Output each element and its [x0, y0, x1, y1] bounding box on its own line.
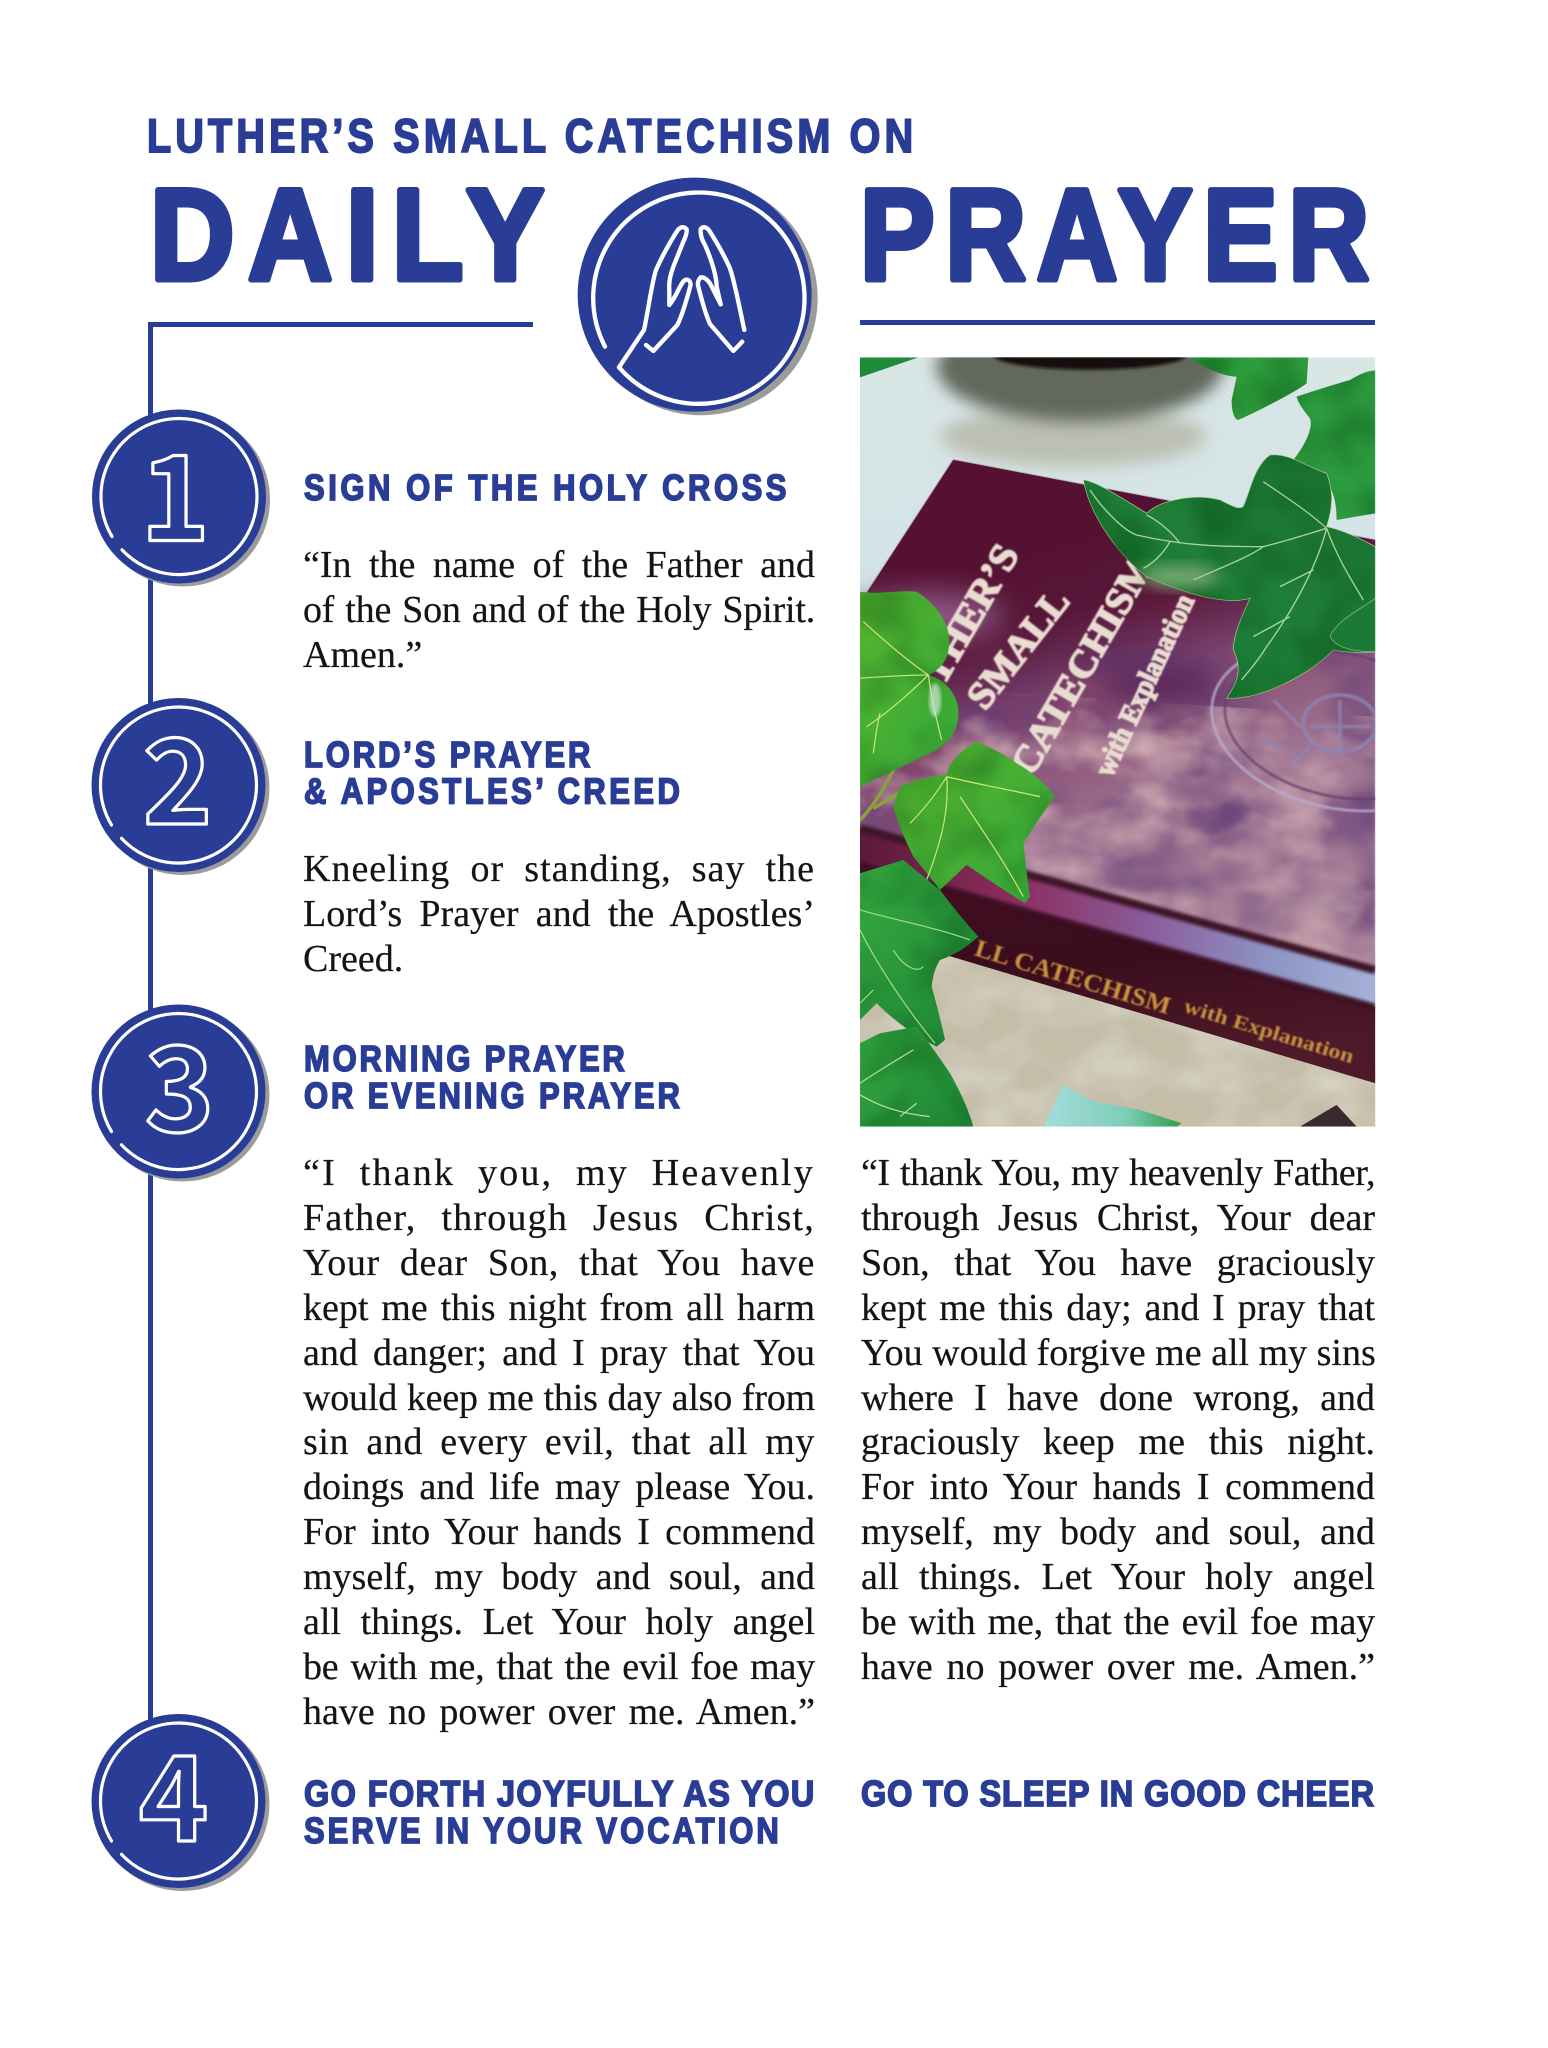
leaf right	[1293, 371, 1375, 520]
body text: evening prayer: where I have done wrong, and	[861, 1377, 1375, 1419]
body text: step 2 instructions: Lord’s Prayer and the Apostles’	[303, 893, 815, 935]
step number 1: 1	[140, 404, 210, 574]
leaf top-left	[860, 357, 918, 377]
body text: morning prayer	[302, 1152, 816, 1733]
body text: morning prayer: and danger; and I pray that You	[303, 1332, 815, 1374]
title: DAILY: DAILY	[150, 163, 544, 308]
body text: evening prayer: “I thank You, my heavenly Father,	[861, 1152, 1375, 1194]
cover title text: CATECHISM	[1003, 548, 1163, 783]
heading: go forth joyfully: SERVE IN YOUR VOCATION	[304, 1812, 779, 1852]
cover title text: with Explanation	[1089, 590, 1201, 781]
photo: catechism book with ivy leaves	[860, 357, 1376, 1127]
title: subtitle line: LUTHER’S SMALL CATECHISM ON	[147, 111, 913, 163]
cover title text: THER’S	[913, 536, 1028, 691]
stems	[860, 763, 898, 820]
cover title text	[928, 542, 1196, 776]
body text: step 2 instructions	[303, 848, 815, 980]
center leaf	[893, 742, 1055, 903]
heading: lord's prayer and apostles' creed: & APOSTLES’ CREED	[304, 772, 680, 812]
body text: evening prayer	[860, 1152, 1376, 1688]
heading: sign of the holy cross: SIGN OF THE HOLY CROSS	[304, 469, 786, 509]
heading: lord's prayer and apostles' creed	[304, 736, 680, 812]
title: PRAYER: PRAYER	[860, 162, 1369, 307]
step 2 badge	[92, 687, 270, 875]
step 4 badge	[92, 1704, 270, 1891]
body text: evening prayer: have no power over me. Amen.”	[861, 1646, 1375, 1688]
body text: evening prayer: graciously keep me this night.	[861, 1421, 1375, 1463]
spine text: LL CATECHISM	[972, 935, 1174, 1020]
book spine	[860, 828, 1375, 1083]
body text: morning prayer: Father, through Jesus Christ,	[303, 1197, 815, 1239]
body text: step 1 prayer	[303, 544, 815, 676]
lower-left leaf	[860, 860, 978, 1047]
body text: evening prayer: Son, that You have graciously	[861, 1242, 1375, 1284]
body text: evening prayer: all things. Let Your holy angel	[861, 1556, 1375, 1598]
body text: step 1 prayer: Amen.”	[303, 634, 422, 676]
spine text	[972, 935, 1357, 1068]
small right leaf	[1330, 598, 1375, 652]
timeline rule and connector	[148, 320, 1375, 1722]
bottom-left leaf	[860, 1027, 973, 1127]
body text: evening prayer: kept me this day; and I pray that	[861, 1287, 1375, 1329]
dark object bottom right	[1300, 1105, 1357, 1127]
body text: morning prayer: kept me this night from all harm	[303, 1287, 815, 1329]
body text: step 2 instructions: Creed.	[303, 938, 403, 980]
bowl	[926, 357, 1232, 474]
cover title text: SMALL	[959, 581, 1078, 717]
body text: step 1 prayer: of the Son and of the Holy Spirit.	[303, 589, 815, 631]
step number 4: 4	[139, 1704, 208, 1875]
bright left leaf	[860, 591, 958, 787]
body text: evening prayer: For into Your hands I commend	[861, 1466, 1375, 1508]
step number 2: 2	[143, 687, 212, 858]
spine text: with Explanation	[1181, 995, 1357, 1068]
body text: evening prayer: be with me, that the evil foe may	[861, 1601, 1375, 1643]
teal leaf	[1043, 1085, 1182, 1127]
marble table	[860, 956, 1376, 1126]
body text: morning prayer: have no power over me. Amen.”	[303, 1691, 815, 1733]
body text: morning prayer: all things. Let Your holy angel	[303, 1601, 815, 1643]
body text: morning prayer: For into Your hands I commend	[303, 1511, 815, 1553]
body text: morning prayer: be with me, that the evil foe may	[303, 1646, 815, 1688]
heading: morning or evening prayer: OR EVENING PRAYER	[304, 1077, 680, 1117]
heading: morning or evening prayer	[304, 1040, 680, 1117]
heading: go forth joyfully: GO FORTH JOYFULLY AS YOU	[304, 1774, 814, 1814]
body text: morning prayer: “I thank you, my Heavenly	[303, 1152, 815, 1194]
heading: go to sleep in good cheer: GO TO SLEEP IN GOOD CHEER	[861, 1774, 1374, 1814]
step 3 badge	[92, 994, 270, 1182]
embossed seal	[1210, 650, 1376, 814]
body text: morning prayer: myself, my body and soul, and	[303, 1556, 815, 1598]
book cover	[860, 460, 1375, 970]
body text: morning prayer: sin and every evil, that all my	[303, 1421, 815, 1463]
icon: praying hands badge	[578, 178, 818, 415]
body text: morning prayer: doings and life may please You.	[303, 1466, 815, 1508]
body text: evening prayer: through Jesus Christ, Your dear	[861, 1197, 1375, 1239]
body text: step 1 prayer: “In the name of the Father and	[303, 544, 815, 586]
heading: morning or evening prayer: MORNING PRAYER	[304, 1040, 625, 1080]
body text: morning prayer: would keep me this day also from	[303, 1377, 815, 1419]
big dark leaf	[1083, 455, 1375, 698]
leaf top-right	[1190, 357, 1308, 420]
heading: lord's prayer and apostles' creed: LORD’S PRAYER	[304, 736, 590, 776]
step 1 badge	[92, 404, 270, 586]
body text: evening prayer: myself, my body and soul, and	[861, 1511, 1375, 1553]
body text: step 2 instructions: Kneeling or standing, say the	[303, 848, 815, 890]
body text: morning prayer: Your dear Son, that You have	[303, 1242, 815, 1284]
heading: go forth joyfully	[304, 1774, 814, 1852]
body text: evening prayer: You would forgive me all my sins	[861, 1332, 1376, 1374]
step number 3: 3	[145, 994, 214, 1166]
